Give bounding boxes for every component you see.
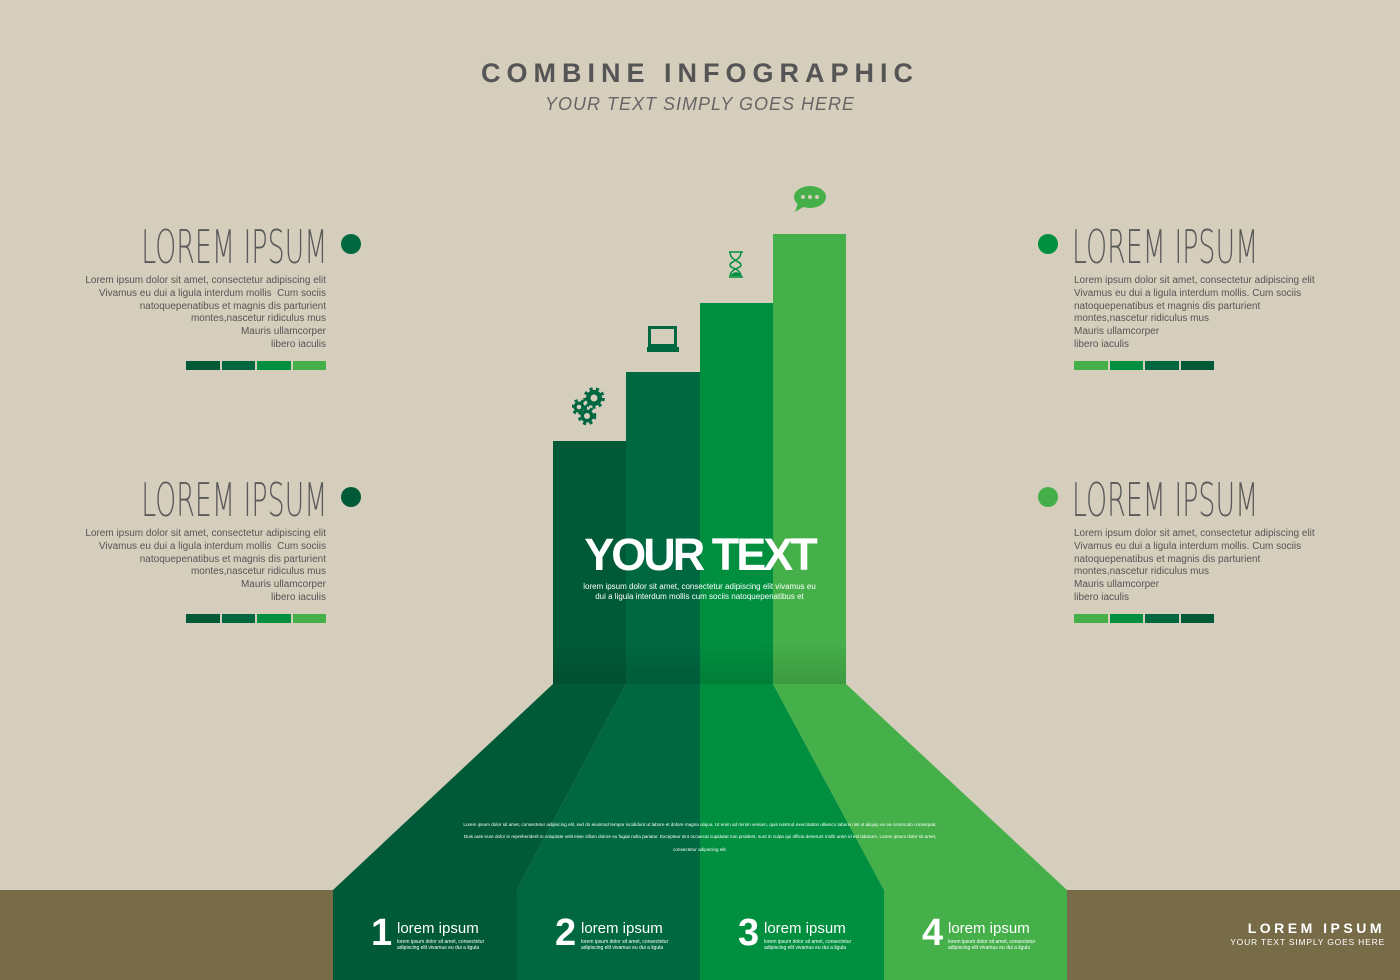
- panel: top left: LOREM IPSUM: [141, 220, 327, 274]
- center text block: [583, 529, 818, 601]
- footer step 1: 1: [371, 912, 392, 954]
- subtitle: YOUR TEXT SIMPLY GOES HERE: [545, 94, 855, 114]
- center text block: lorem ipsum dolor sit amet, consectetur adipiscing elit vivamus eu: [583, 582, 816, 591]
- panel: bottom left: Vivamus eu dui a ligula interdum mollis Cum sociis: [99, 541, 326, 552]
- footer step 4: lorem ipsum: [948, 920, 1030, 937]
- panel: top left: Mauris ullamcorper: [241, 326, 326, 337]
- panel: bottom right: montes,nascetur ridiculus mus: [1074, 566, 1209, 577]
- footer step 1: [371, 912, 484, 954]
- footer step 3: lorem ipsum dolor sit amet, consectetur adipiscing elit vivamus eu dui a ligula: [764, 939, 851, 951]
- footer step 4: 4: [922, 912, 943, 954]
- panel: bottom left: Mauris ullamcorper: [241, 579, 326, 590]
- panel: bottom right: libero iaculis: [1074, 592, 1129, 603]
- panel: top left: natoquepenatibus et magnis dis parturient: [140, 301, 326, 312]
- icon: hourglass: [729, 251, 743, 278]
- icon: gears: [572, 387, 605, 426]
- panel: top right: Mauris ullamcorper: [1074, 326, 1159, 337]
- panel: top left: libero iaculis: [271, 339, 326, 350]
- panel: top left: Vivamus eu dui a ligula interdum mollis Cum sociis: [99, 288, 326, 299]
- footer brand: LOREM IPSUM: [1248, 920, 1385, 936]
- panel: top left: montes,nascetur ridiculus mus: [191, 313, 326, 324]
- footer brand: YOUR TEXT SIMPLY GOES HERE: [1230, 937, 1385, 947]
- panel: top left: [85, 220, 361, 370]
- panel: bottom left: Lorem ipsum dolor sit amet, consectetur adipiscing elit: [85, 528, 326, 539]
- panel: bottom right: natoquepenatibus et magnis dis parturient: [1074, 554, 1260, 565]
- panel: bottom right: LOREM IPSUM: [1072, 473, 1258, 527]
- icon: speech bubble: [794, 186, 826, 212]
- panel: top right: [1038, 220, 1315, 370]
- footer step 1: lorem ipsum: [397, 920, 479, 937]
- panel: bottom left: montes,nascetur ridiculus mus: [191, 566, 326, 577]
- panel: bottom right: Mauris ullamcorper: [1074, 579, 1159, 590]
- center text block: dui a ligula interdum mollis cum sociis natoquepenatibus et: [595, 592, 804, 601]
- footer brand: [1230, 920, 1385, 947]
- center text block: YOUR TEXT: [584, 529, 815, 580]
- panel: top right: LOREM IPSUM: [1072, 220, 1258, 274]
- panel: bottom left: [85, 473, 361, 623]
- footer step 2: lorem ipsum dolor sit amet, consectetur adipiscing elit vivamus eu dui a ligula: [581, 939, 668, 951]
- footer step 3: [738, 912, 852, 954]
- footer step 4: lorem ipsum dolor sit amet, consectetur adipiscing elit vivamus eu dui a ligula: [948, 939, 1035, 951]
- footer step 4: [922, 912, 1036, 954]
- panel: top right: libero iaculis: [1074, 339, 1129, 350]
- panel: top right: natoquepenatibus et magnis dis parturient: [1074, 301, 1260, 312]
- title: COMBINE INFOGRAPHIC: [481, 58, 919, 88]
- panel: bottom right: Lorem ipsum dolor sit amet, consectetur adipiscing elit: [1074, 528, 1315, 539]
- footer step 2: 2: [555, 912, 576, 954]
- panel: top right: montes,nascetur ridiculus mus: [1074, 313, 1209, 324]
- panel: bottom left: libero iaculis: [271, 592, 326, 603]
- panel: bottom left: natoquepenatibus et magnis dis parturient: [140, 554, 326, 565]
- footer step 3: 3: [738, 912, 759, 954]
- panel: bottom left: LOREM IPSUM: [141, 473, 327, 527]
- panel: bottom right: [1038, 473, 1315, 623]
- panel: top right: Vivamus eu dui a ligula interdum mollis. Cum sociis: [1074, 288, 1301, 299]
- base paragraph: Lorem ipsum dolor sit amet, consectetur adipiscing elit, sed do eiusmod tempor incididunt ut labore et dolore magna aliqua. Ut enim ad minim veniam, quis nostrud exercitation ullamco laboris nisi ut aliquip ex ea commodo consequat. Duis aute irure dolor in reprehenderit in voluptate velit esse cillum dolore eu fugiat nulla pariatur. Excepteur sint occaecat cupidatat non proident, sunt in culpa qui officia deserunt mollit anim id est laborum. Lorem ipsum dolor sit amet, consectetur adipiscing elit.: [463, 822, 937, 852]
- panel: top right: Lorem ipsum dolor sit amet, consectetur adipiscing elit: [1074, 275, 1315, 286]
- icon: laptop: [647, 326, 679, 352]
- footer step 3: lorem ipsum: [764, 920, 846, 937]
- panel: bottom right: Vivamus eu dui a ligula interdum mollis. Cum sociis: [1074, 541, 1301, 552]
- footer step 2: lorem ipsum: [581, 920, 663, 937]
- footer step 2: [555, 912, 668, 954]
- panel: top left: Lorem ipsum dolor sit amet, consectetur adipiscing elit: [85, 275, 326, 286]
- footer step 1: lorem ipsum dolor sit amet, consectetur adipiscing elit vivamus eu dui a ligula: [397, 939, 484, 951]
